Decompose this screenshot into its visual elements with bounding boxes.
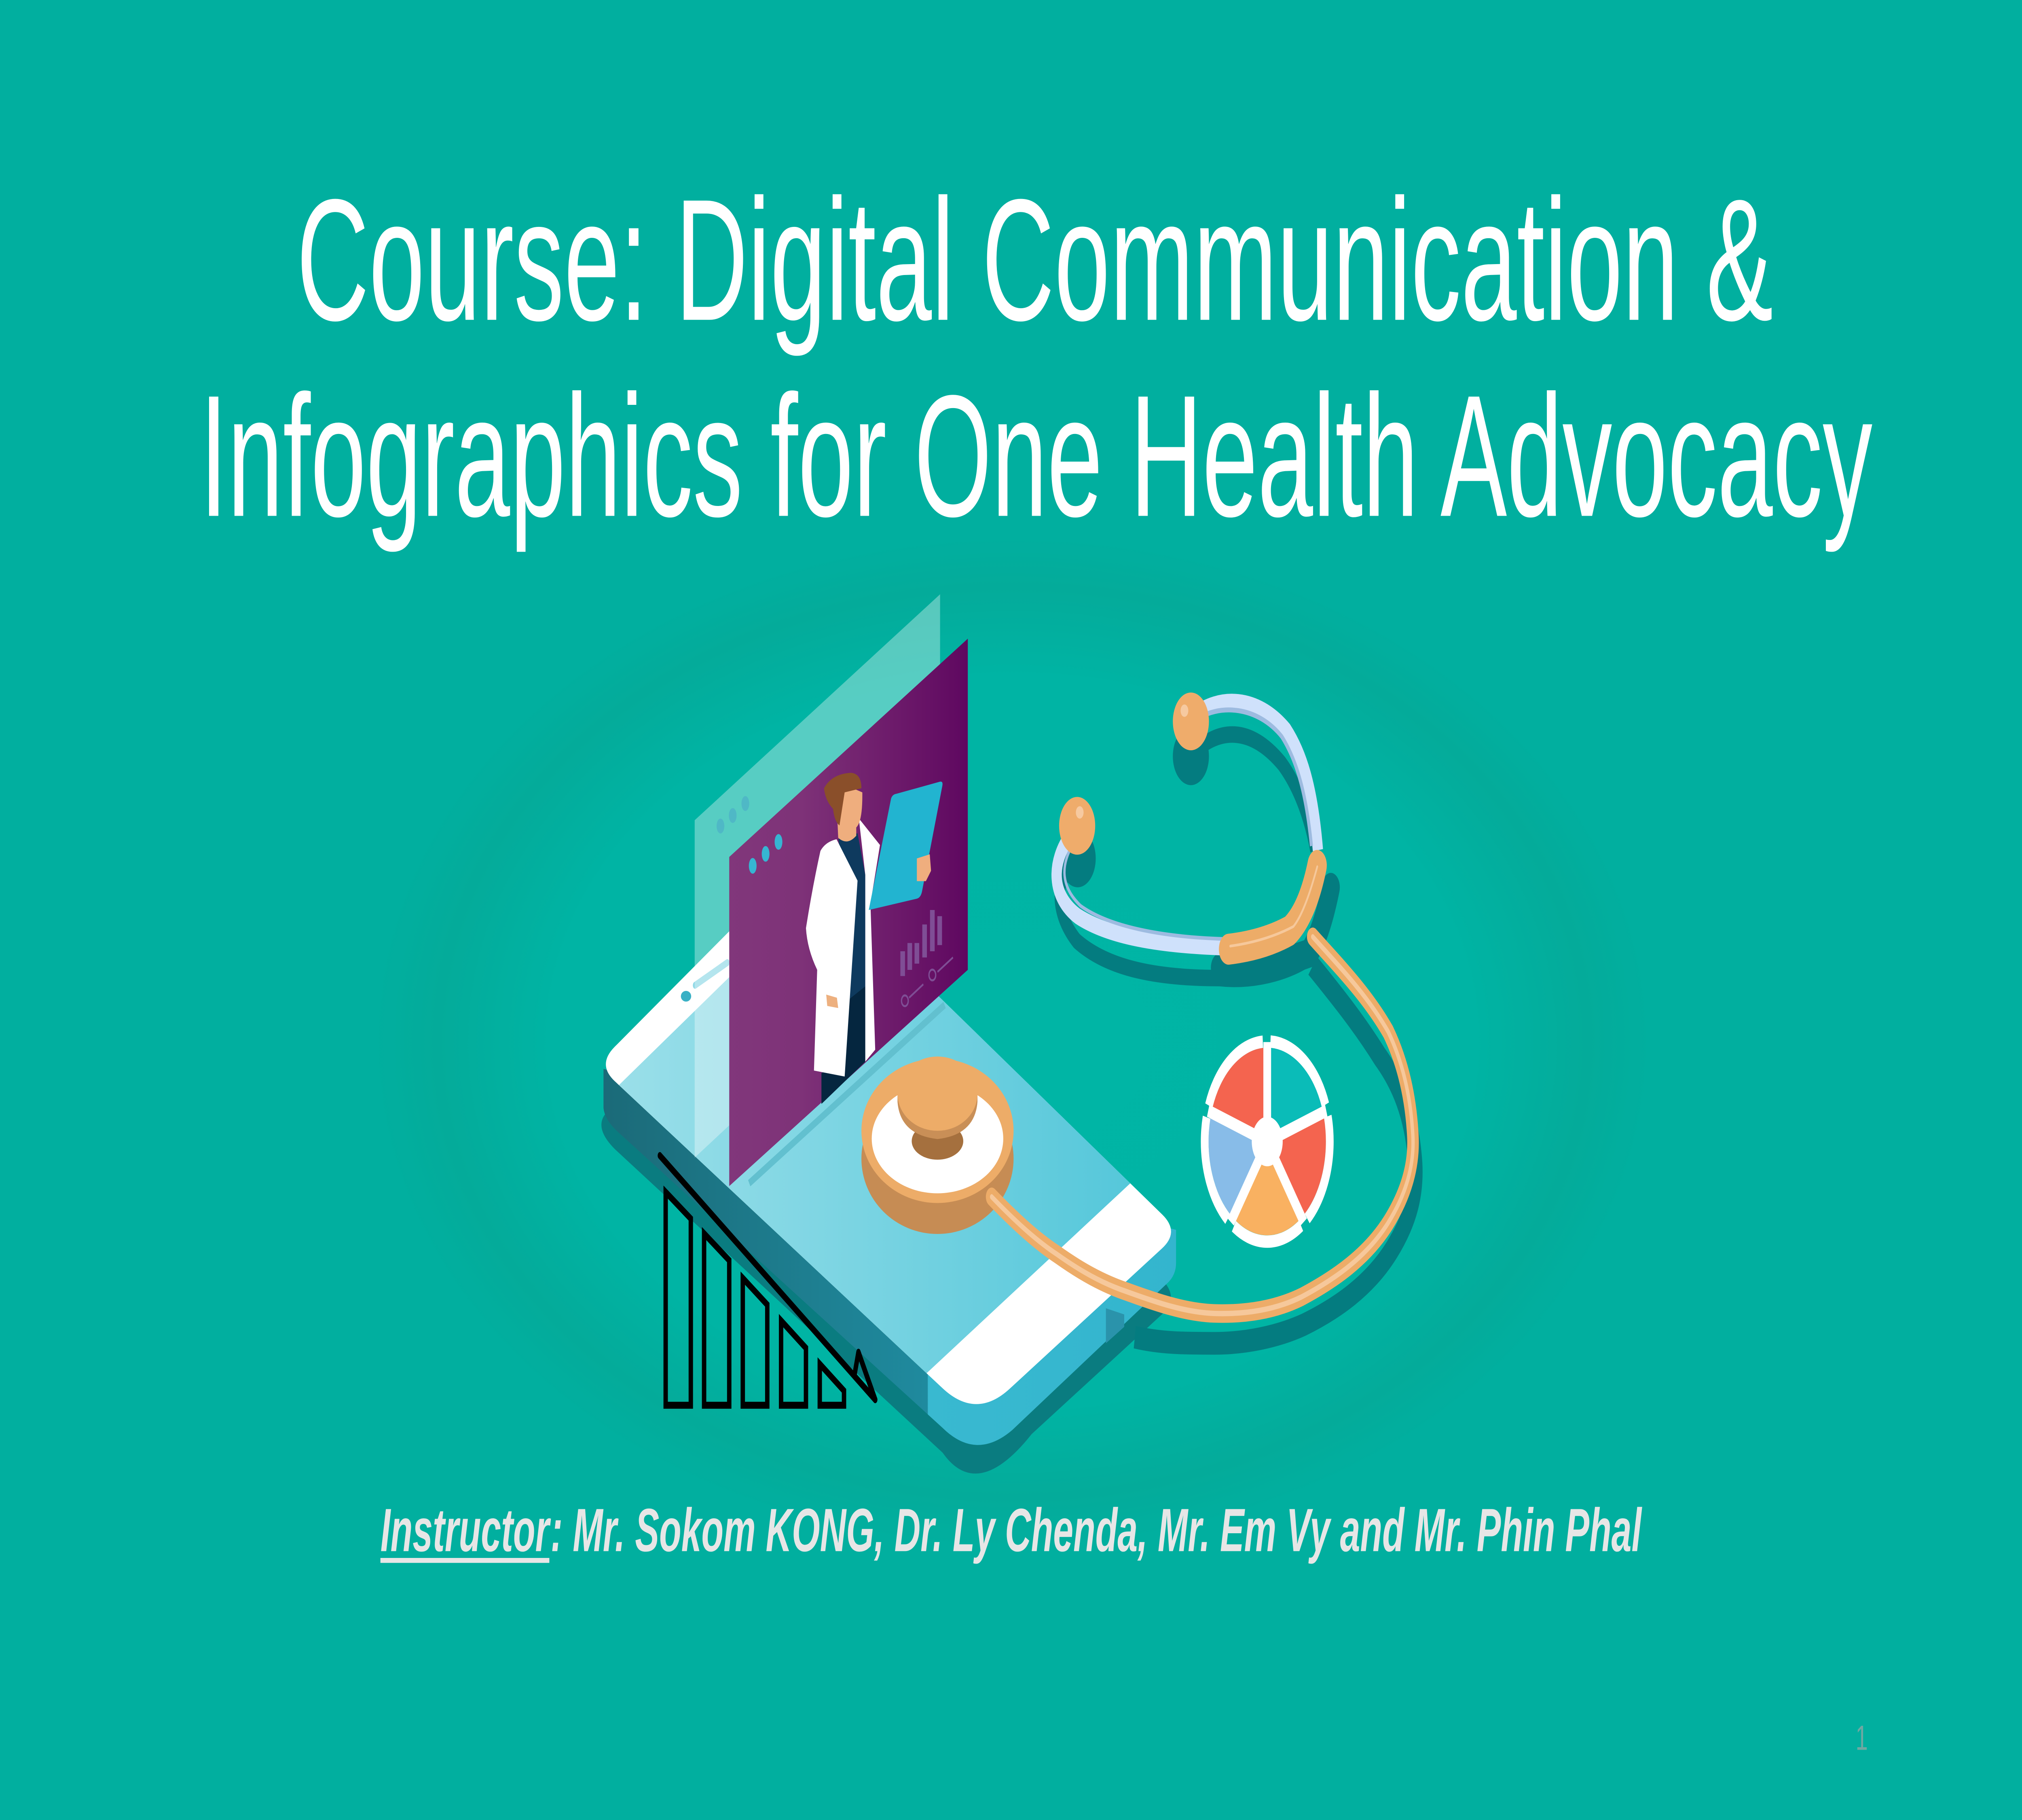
title: Infographics for One Health Advocacy [200,359,1872,554]
chest piece [861,1056,1013,1234]
panel shadow strip [749,1005,945,1183]
title: Course: Digital Communication & [296,163,1773,358]
phone side [603,1069,1176,1445]
pocket [826,995,838,1008]
phone shadow [601,929,1171,1473]
title [200,163,1872,554]
pie wheel icon [1201,1035,1333,1248]
left ear tube [1057,836,1223,947]
illustration: stethoscope [861,692,1415,1343]
headset shadow [1060,734,1316,979]
tube shadow [1135,966,1415,1343]
phone top face [606,861,1171,1404]
window dots [749,834,783,874]
background halo [374,537,1651,1548]
tube [992,937,1413,1314]
illustration: smartphone [601,931,1176,1474]
doctor head [837,784,862,841]
phone screen [619,977,1130,1373]
phone speaker [681,963,727,1002]
doctor coat left [806,839,858,1077]
doctor shirt [838,833,865,1079]
ear tips [1173,692,1209,750]
mini bar chart [903,910,940,976]
doctor hair [824,773,861,825]
right ear tube [1193,702,1318,850]
purple video panel with doctor [729,639,968,1186]
declining bar chart icon [660,1155,875,1405]
instructor line: : Mr. Sokom KONG, Dr. Ly Chenda, Mr. Em Vy and Mr. Phin Phal [551,1496,1642,1564]
hand [917,854,931,881]
Y connector [1229,866,1317,949]
instructor line: Instructor [381,1496,551,1564]
mini legend [901,957,953,1006]
back translucent panel [695,594,940,1158]
tablet [869,781,943,910]
doctor legs [821,1052,865,1104]
slide [209,194,1872,1750]
tube shadow on phone side [1106,1308,1124,1343]
page number: 1 [1856,1719,1868,1758]
doctor coat right [859,818,880,1062]
